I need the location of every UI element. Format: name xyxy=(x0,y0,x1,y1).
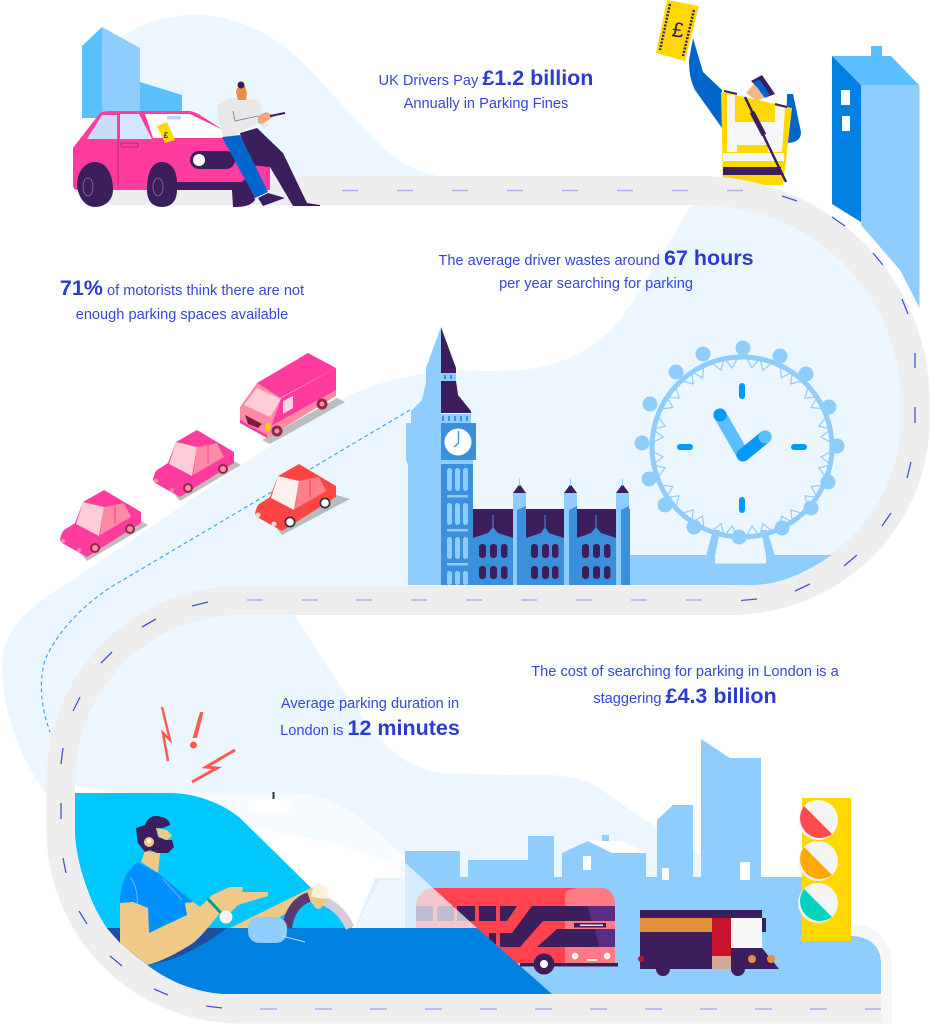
text: parking duration xyxy=(280,696,460,740)
text: parking duration: London is 12 minutes xyxy=(280,716,460,740)
illustration: side mirror xyxy=(248,917,305,943)
illustration: windscreen xyxy=(75,785,410,928)
text: cost of searching: staggering £4.3 billion xyxy=(593,684,777,708)
text: parking fines xyxy=(379,66,593,112)
illustration: London Eye clock xyxy=(630,340,844,585)
text: parking fines: Annually in Parking Fines xyxy=(404,96,568,112)
background blob: top xyxy=(122,15,470,200)
illustration: pink van xyxy=(240,353,345,444)
text: hours searching xyxy=(438,246,754,292)
text: hours searching: per year searching for parking xyxy=(499,276,693,292)
windscreen fade over bus xyxy=(355,858,477,928)
illustration: red car xyxy=(255,464,350,535)
text: parking fines: UK Drivers Pay £1.2 billion xyxy=(379,66,593,90)
illustration: traffic warden xyxy=(656,0,801,185)
illustration: London skyline and block xyxy=(405,739,881,994)
illustration: pink car left xyxy=(60,490,148,561)
road centre dashes: curved sections xyxy=(61,196,915,1008)
car: £ xyxy=(164,131,169,140)
illustration: driver xyxy=(107,816,350,965)
background blob: lower xyxy=(61,601,702,880)
man leaning on car xyxy=(218,82,320,206)
illustration: traffic warden: £ xyxy=(671,18,686,43)
text: cost of searching xyxy=(531,664,840,708)
illustration: Big Ben and Parliament xyxy=(406,327,630,585)
building behind car xyxy=(82,27,182,118)
building: right tower xyxy=(832,46,920,308)
dashed route line xyxy=(41,410,410,732)
text: hours searching: The average driver wastes around 67 hours xyxy=(438,246,754,270)
car xyxy=(73,111,270,207)
road end: faded edge xyxy=(851,925,892,1024)
illustration: pink car middle xyxy=(153,430,241,501)
illustration: car with parking ticket and man xyxy=(73,27,320,207)
text: motorists xyxy=(60,276,304,323)
illustration: delivery truck xyxy=(638,910,779,976)
text: cost of searching: The cost of searching for parking in London is a xyxy=(531,664,840,680)
text: motorists: enough parking spaces available xyxy=(76,307,288,323)
text: motorists: 71% of motorists think there are not xyxy=(60,276,304,300)
illustration: traffic light xyxy=(798,798,851,941)
illustration: red alert marks xyxy=(162,707,235,782)
illustration: double decker bus xyxy=(416,888,618,974)
text: parking duration: Average parking duration in xyxy=(281,696,459,712)
background blob: middle xyxy=(2,191,915,795)
illustration: dashboard xyxy=(107,928,552,994)
road xyxy=(61,190,915,1009)
road centre dashes: straight sections xyxy=(247,190,881,1009)
